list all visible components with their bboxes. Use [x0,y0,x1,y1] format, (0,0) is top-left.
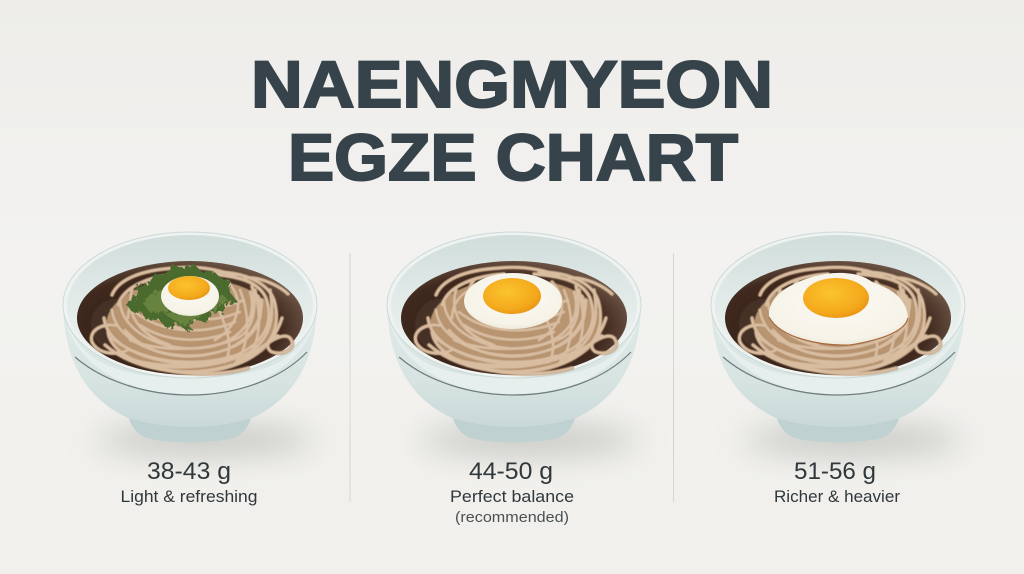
panel: medium egg bowl [387,232,641,442]
bowl with noodles [711,232,965,442]
egg: large [769,273,908,345]
label: 38-43 g [120,458,258,506]
column divider right [673,253,674,502]
garnish: seaweed [126,264,238,332]
panel: large egg bowl [711,232,965,442]
label: 51-56 g: Richer & heavier [774,487,900,506]
egg: medium [464,273,562,329]
label: 44-50 g [450,458,574,526]
label: 44-50 g: Perfect balance [450,487,574,506]
bowl with noodles [63,232,317,442]
label: 44-50 g: 44-50 g [469,458,553,485]
column divider left [350,253,351,502]
label: 51-56 g: 51-56 g [794,458,876,485]
label: 38-43 g: 38-43 g [147,458,231,485]
label: 38-43 g: Light & refreshing [120,487,258,506]
bowl shadows [95,426,963,454]
egg: small [161,276,219,316]
label: 51-56 g [774,458,900,506]
panel: light egg bowl [63,232,317,442]
bowl with noodles [387,232,641,442]
title: EGZE CHART [288,120,738,194]
title [251,47,773,194]
label: 44-50 g: (recommended) [455,509,569,526]
title: NAENGMYEON [251,47,773,121]
